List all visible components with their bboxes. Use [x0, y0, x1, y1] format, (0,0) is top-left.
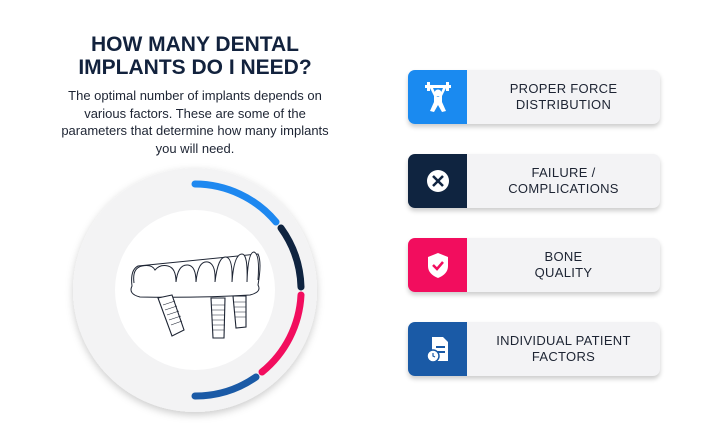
card: proper force distribution [408, 70, 660, 124]
card: failure / complications [408, 154, 660, 208]
card: failure / complications: COMPLICATIONS [508, 181, 619, 196]
intro text [61, 88, 329, 156]
title [78, 33, 312, 79]
icon: shield check [408, 238, 467, 292]
circle graphic [70, 168, 320, 418]
intro text: parameters that determine how many implants [61, 123, 329, 138]
intro text: The optimal number of implants depends on [68, 88, 322, 103]
icon: dental implant drawing [131, 252, 260, 338]
card: bone quality [408, 238, 660, 292]
icon: document clock [408, 322, 467, 376]
card: proper force distribution: PROPER FORCE [510, 81, 617, 96]
intro text: you will need. [156, 140, 234, 156]
icon: x circle [408, 154, 467, 208]
card: bone quality: QUALITY [535, 265, 592, 280]
card: individual patient factors: FACTORS [532, 349, 595, 364]
card: failure / complications: FAILURE / [531, 165, 596, 180]
card: bone quality: BONE [544, 249, 583, 264]
intro text: various factors. These are some of the [84, 106, 306, 120]
card: individual patient factors: INDIVIDUAL PATIENT [496, 333, 631, 348]
title: IMPLANTS DO I NEED? [78, 56, 312, 79]
card: individual patient factors [408, 322, 660, 376]
card: proper force distribution: DISTRIBUTION [516, 97, 611, 112]
title: HOW MANY DENTAL [91, 33, 299, 56]
icon: weightlifter [408, 70, 467, 124]
